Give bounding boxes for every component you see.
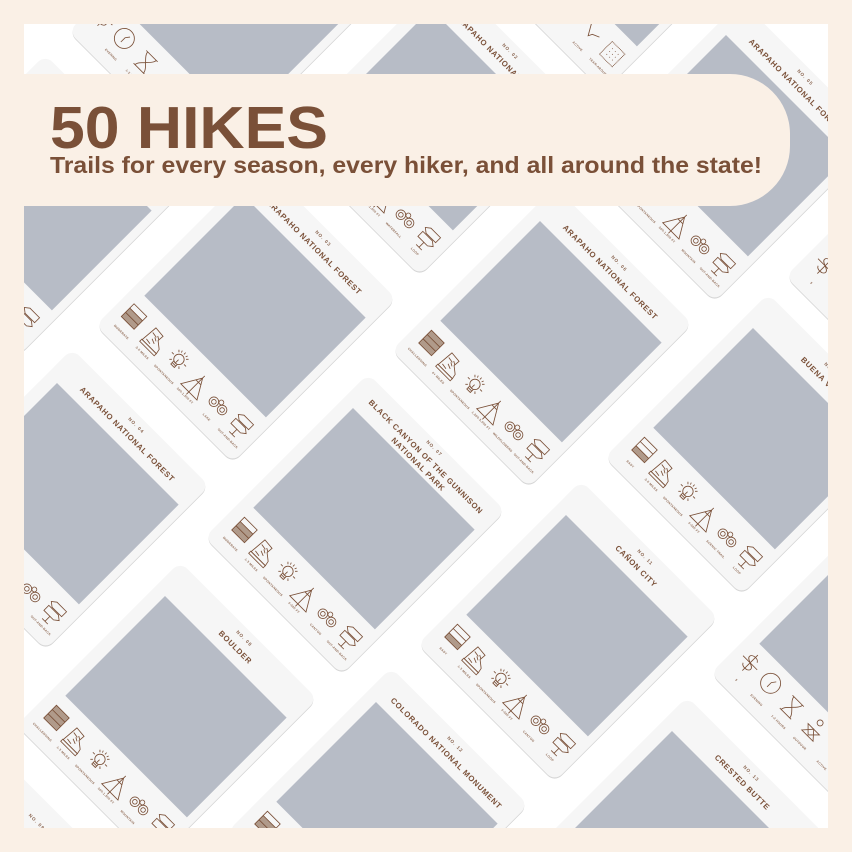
card: upper right strip (785, 113, 852, 415)
card: no. 07: OUT-AND-BACK (326, 639, 348, 662)
card: no. 08 boulder: MOUNTAIN (119, 809, 136, 826)
card: no. 03: OUT-AND-BACK (217, 427, 239, 450)
card: right column, dollar and clock strip: $ (734, 678, 738, 682)
card: no. 08 boulder: NO. 08 (235, 629, 253, 647)
card: no. 06: ARAPAHO NATIONAL FOREST (561, 223, 660, 322)
card: top-left strip, evening (68, 0, 370, 170)
card: no. 02: LOOP (410, 247, 420, 256)
card: no. 02 (282, 0, 584, 277)
card: no. 07: SPONTANEOUS (262, 576, 284, 597)
card: no. 13 crested butte: NO. 13 (742, 764, 760, 782)
card: no. 07: 1-3 MILES (244, 557, 259, 572)
card: no. 05: SPONTANEOUS (635, 203, 657, 224)
card: no. 06: OUT-AND-BACK (513, 452, 535, 475)
card: no. 03: MODERATE (113, 324, 130, 341)
card: no. 07: 0-500 FT (287, 601, 301, 614)
card: no. 07 (204, 374, 506, 676)
card: no. 07: BLACK CANYON OF THE GUNNISON (367, 398, 485, 516)
card: no. 04 (0, 349, 210, 651)
card: no. 03: LAKE (202, 413, 211, 422)
card: no. 08 boulder: 500-1,500 FT (97, 787, 115, 805)
card: top-left strip, evening: 1-2 HOURS (125, 69, 141, 85)
card: no. 11 canon city: LOOP (545, 753, 555, 762)
card: no. 06 (391, 187, 693, 489)
card: no. 06: CHALLENGING (407, 347, 428, 368)
card: no. 02: WATERFALL (385, 221, 402, 239)
card: no. 03: NO. 03 (314, 229, 332, 247)
card: no. 02: NO. 02 (501, 42, 519, 60)
card: no. 08 boulder: OUT-AND-BACK (138, 827, 160, 850)
card: no. 08 boulder (16, 562, 318, 852)
card: no. 06: 6+ MILES (431, 371, 445, 385)
card: no. 10 buena vista: BUENA VISTA (799, 355, 848, 404)
card: no. 08 boulder: SPONTANEOUS (74, 764, 96, 785)
card: no. 06: 1,500-3,000 FT (471, 411, 491, 431)
banner (0, 74, 790, 206)
card: no. 01: YEAR-AROUND (588, 57, 610, 79)
card: no. 03: 500-1,500 FT (176, 387, 194, 405)
card: no. 06: WILDFLOWERS (492, 432, 513, 453)
card: no. 05 (577, 1, 852, 303)
heading: 50 HIKES (50, 94, 328, 161)
card: no. 04: NO. 04 (127, 416, 145, 434)
card: no. 08 boulder: BOULDER (217, 629, 254, 666)
card: no. 05: ARAPAHO NATIONAL FOREST (747, 37, 846, 136)
card: no. 01: ACTIVE (572, 40, 584, 52)
card: no. 10 buena vista: NO. 10 (823, 361, 841, 379)
card: right column, dollar and clock strip (710, 510, 852, 812)
card: no. 10 buena vista: SCENIC TRAIL (705, 539, 726, 560)
card: no. 10 buena vista: 0-500 FT (687, 521, 701, 534)
card: no. 07: MODERATE (222, 536, 239, 553)
card: no. 03 (95, 162, 397, 464)
card: no. 05: MOUNTAIN (680, 248, 697, 265)
card: no. 10 buena vista: 3-6 MILES (644, 477, 659, 492)
subheading: Trails for every season, every hiker, and all around the state! (50, 152, 762, 178)
card: no. 11 canon city (417, 481, 719, 783)
card: no. 02: 500-1,000 FT (363, 200, 381, 218)
card: right column, dollar and clock strip: EVENING (749, 693, 764, 708)
card: left column hidden (0, 55, 183, 357)
card: no. 07: CANYON (309, 623, 323, 636)
card: right column, dollar and clock strip: 1-2 HOURS (770, 714, 787, 730)
card: no. 11 canon city: SPONTANEOUS (475, 683, 497, 704)
card: no. 11 canon city: EASY (439, 646, 449, 656)
card: no. 13 crested butte: CRESTED BUTTE (713, 753, 772, 812)
card: no. 13 crested butte (523, 697, 825, 852)
card: no. 05: NO. 05 (796, 68, 814, 86)
card: upper right strip: $ (809, 281, 813, 285)
card: right column, dollar and clock strip: ACTIVE (816, 759, 828, 771)
card: no. 12 colorado national monument: NO. 12 (446, 735, 464, 753)
card: no. 10 buena vista: SPONTANEOUS (662, 496, 684, 517)
card: no. 03: SPONTANEOUS (153, 364, 175, 385)
card: no. 11 canon city: 1-3 MILES (457, 664, 472, 679)
card: no. 12 colorado national monument: COLORADO NATIONAL MONUMENT (389, 696, 504, 811)
card: no. 04: OUT-AND-BACK (30, 614, 52, 637)
card: no. 09: NO. 09 (28, 813, 46, 831)
card: no. 11 canon city: 0-500 FT (500, 708, 514, 721)
card: no. 06: SPONTANEOUS (449, 389, 471, 410)
card: no. 07: NATIONAL PARK (389, 436, 447, 493)
card: no. 09 (0, 749, 131, 852)
card: no. 07: NO. 07 (425, 439, 443, 457)
card: no. 10 buena vista: EASY (626, 459, 636, 469)
card: no. 08 boulder: CHALLENGING (32, 722, 53, 743)
card: no. 01 (466, 0, 768, 93)
card: no. 11 canon city: NO. 11 (636, 548, 654, 566)
card: no. 06: NO. 06 (610, 254, 628, 272)
card: top-left strip, evening: EVENING (104, 48, 118, 62)
card: no. 05: 500-1,500 FT (658, 226, 676, 244)
card: no. 10 buena vista (604, 294, 852, 596)
card: no. 03: 3-6 MILES (135, 345, 150, 360)
card: no. 08 boulder: 1-3 MILES (56, 745, 71, 760)
card: no. 11 canon city: CAÑON CITY (613, 544, 659, 589)
card: no. 11 canon city: CANYON (522, 730, 536, 743)
card: no. 05: OUT-AND-BACK (699, 266, 721, 289)
card: no. 04: ARAPAHO NATIONAL FOREST (78, 385, 177, 484)
card: no. 03: ARAPAHO NATIONAL FOREST (265, 198, 364, 297)
card: no. 02: ARAPAHO NATIONAL FOREST (452, 11, 551, 110)
card: right column, dollar and clock strip: OUTDOOR (792, 736, 808, 751)
card: no. 12 colorado national monument (227, 668, 529, 852)
card: no. 10 buena vista: LOOP (732, 566, 742, 575)
